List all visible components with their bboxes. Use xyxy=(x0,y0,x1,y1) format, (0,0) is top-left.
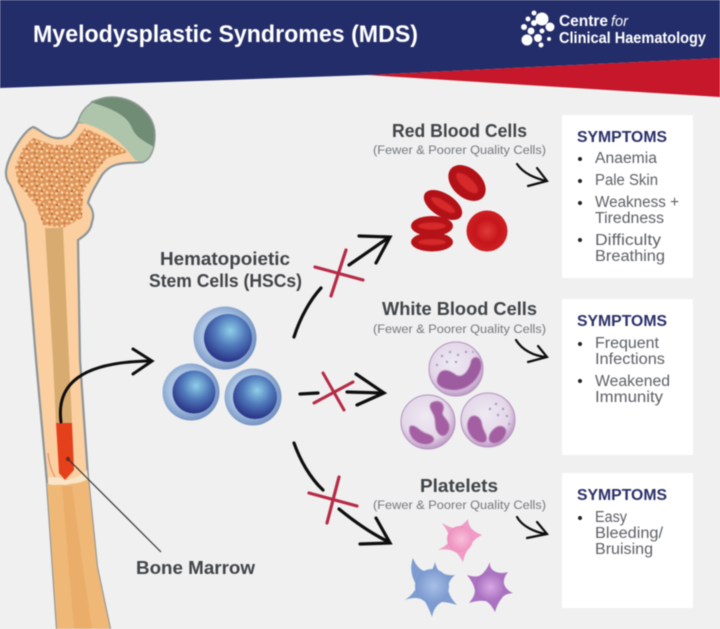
card: red blood cell symptoms: Weakness + xyxy=(595,194,679,211)
heading: White Blood Cells: White Blood Cells xyxy=(382,299,537,319)
card: white blood cell symptoms xyxy=(562,299,693,455)
card: white blood cell symptoms: Immunity xyxy=(595,389,663,406)
logo text xyxy=(559,13,706,47)
arrow: bone marrow to stem cells xyxy=(60,349,152,422)
card: red blood cell symptoms xyxy=(562,115,693,278)
card: white blood cell symptoms: Infections xyxy=(595,351,665,368)
heading: Platelets xyxy=(373,476,546,512)
logo text: Clinical Haematology xyxy=(559,30,706,47)
header banner xyxy=(0,0,720,97)
logo text: Centre xyxy=(559,13,608,30)
arrow with cross: platelets xyxy=(294,443,390,544)
small arrow to platelet symptoms xyxy=(517,517,547,538)
heading: Hematopoietic Stem Cells xyxy=(149,249,302,291)
icon: red blood cells xyxy=(411,158,508,252)
card: red blood cell symptoms: Difficulty xyxy=(595,232,661,249)
card: platelet symptoms: Easy xyxy=(595,509,627,526)
bone body xyxy=(6,122,143,629)
card: red blood cell symptoms: Anaemia xyxy=(595,150,657,167)
heading: Red Blood Cells xyxy=(373,121,546,157)
small arrow to white blood cell symptoms xyxy=(516,340,547,362)
arrow with cross: white blood cells xyxy=(300,373,384,410)
red bone marrow section xyxy=(56,423,74,480)
icon: platelets xyxy=(405,519,513,617)
heading: Hematopoietic Stem Cells: Hematopoietic xyxy=(160,249,290,269)
logo icon: cell cluster xyxy=(521,10,554,48)
heading: Hematopoietic Stem Cells: Stem Cells (HSCs) xyxy=(149,271,302,291)
arrow with cross: red blood cells xyxy=(294,236,390,337)
logo: Centre for Clinical Haematology xyxy=(521,10,706,48)
card: platelet symptoms: Bruising xyxy=(595,541,653,558)
heading: Platelets: (Fewer & Poorer Quality Cells) xyxy=(373,500,546,512)
card: red blood cell symptoms: Breathing xyxy=(595,248,665,265)
title: Myelodysplastic Syndromes (MDS) xyxy=(33,21,418,48)
card: red blood cell symptoms: Tiredness xyxy=(595,210,664,227)
label: Bone Marrow: Bone Marrow xyxy=(136,558,256,578)
femur bone illustration xyxy=(6,97,155,629)
small arrow to red blood cell symptoms xyxy=(517,164,547,186)
heading: White Blood Cells: (Fewer & Poorer Quality Cells) xyxy=(373,324,546,336)
card: platelet symptoms xyxy=(562,473,693,608)
card: platelet symptoms: SYMPTOMS xyxy=(577,487,667,504)
card: red blood cell symptoms: Pale Skin xyxy=(595,172,658,189)
bone head cartilage xyxy=(78,97,155,162)
heading: White Blood Cells xyxy=(373,299,546,336)
card: white blood cell symptoms: Weakened xyxy=(595,373,670,390)
heading: Red Blood Cells: (Fewer & Poorer Quality Cells) xyxy=(373,145,546,157)
heading: Platelets: Platelets xyxy=(420,476,498,496)
marrow cavity xyxy=(45,228,72,423)
bone marrow leader line xyxy=(66,457,161,552)
heading: Red Blood Cells: Red Blood Cells xyxy=(392,121,527,141)
card: white blood cell symptoms: Frequent xyxy=(595,335,660,352)
stem cells cluster xyxy=(162,306,282,426)
card: red blood cell symptoms: SYMPTOMS xyxy=(577,129,667,146)
icon: white blood cells xyxy=(401,342,515,449)
card: platelet symptoms: Bleeding/ xyxy=(595,525,664,542)
card: white blood cell symptoms: SYMPTOMS xyxy=(577,313,667,330)
lower bone section xyxy=(47,477,110,629)
spongy bone xyxy=(15,128,128,228)
logo text: for xyxy=(611,13,629,30)
